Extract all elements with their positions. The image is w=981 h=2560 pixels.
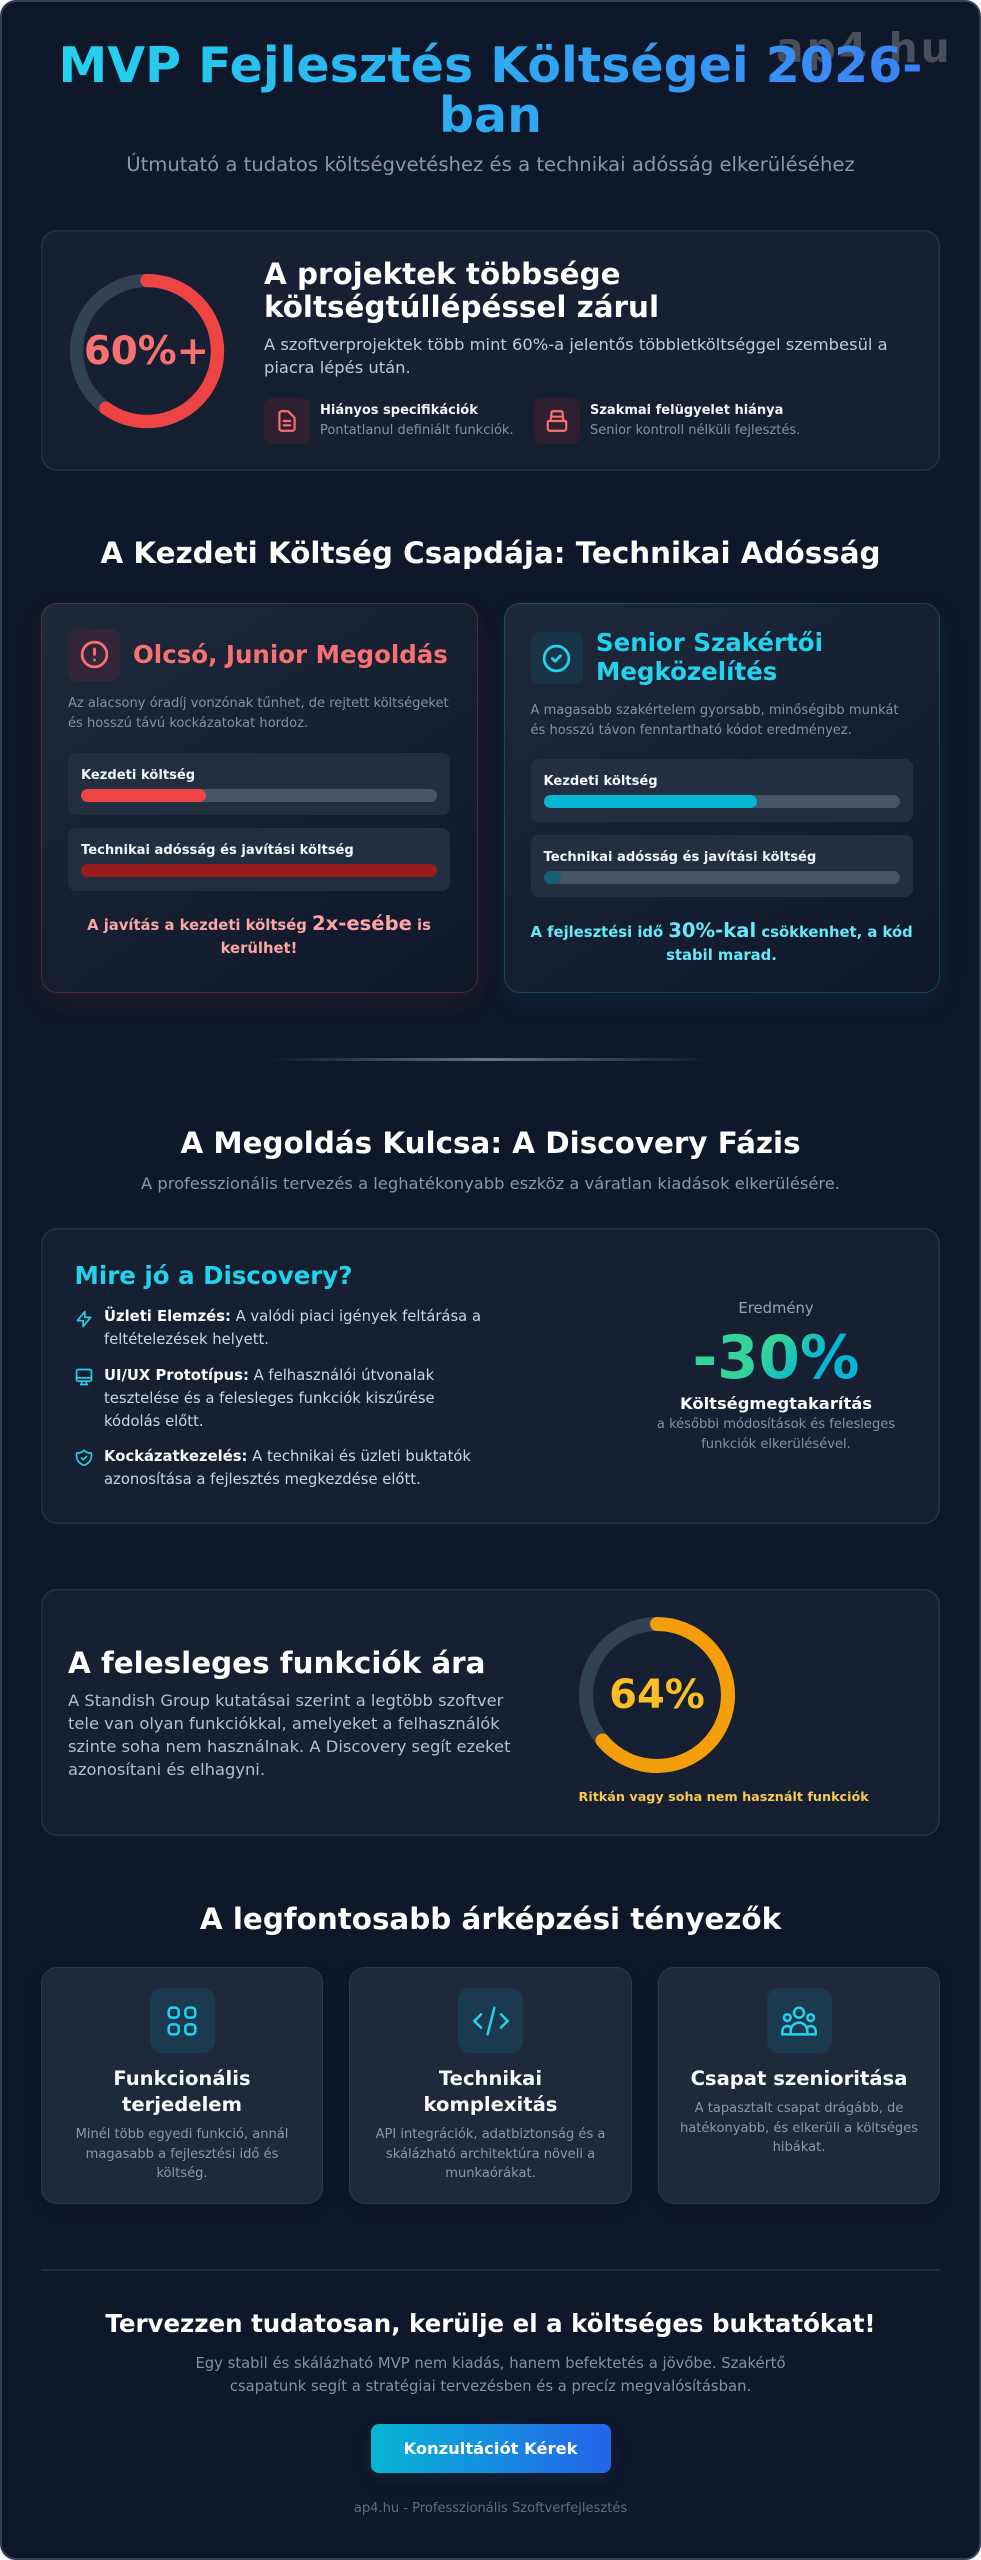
watermark: ap4.hu [776, 24, 953, 72]
description: szinte soha nem használnak. A Discovery segít ezeket [68, 1737, 510, 1756]
item text: UI/UX Prototípus: A felhasználói útvonalak [104, 1366, 434, 1384]
icon: bolt [76, 1310, 92, 1328]
icon: document [264, 398, 310, 444]
item text: feltételezések helyett. [104, 1330, 269, 1348]
card text: Minél több egyedi funkció, annál [76, 2127, 288, 2142]
stat note: funkciók elkerülésével. [701, 1436, 851, 1452]
item text [590, 403, 800, 438]
icon: warning [68, 628, 120, 680]
card text: költség. [156, 2166, 208, 2181]
bar track [544, 871, 900, 884]
callout: A fejlesztési idő 30%-kal csökkenhet, a kód [530, 919, 913, 942]
card text: skálázható architektúra növeli a [386, 2146, 595, 2162]
icon: shield [76, 1450, 92, 1466]
item text: kódolás előtt. [104, 1412, 204, 1430]
card description [530, 703, 899, 738]
heading: A felesleges funkciók ára [68, 1646, 486, 1680]
description: azonosítani és elhagyni. [68, 1760, 265, 1779]
bar track [81, 789, 437, 802]
bar label: Technikai adósság és javítási költség [81, 843, 354, 858]
list item: business analysis [76, 1306, 481, 1348]
description [264, 335, 888, 377]
card heading: Senior Szakértői [596, 628, 823, 657]
callout: stabil marad. [666, 947, 777, 964]
card description [68, 696, 449, 730]
donut chart: 60%+ [70, 274, 224, 428]
heading: költségtúllépéssel zárul [264, 290, 659, 324]
bar: initial cost [68, 753, 450, 815]
result label: Eredmény [738, 1300, 814, 1317]
card text: magasabb a fejlesztési idő és [86, 2146, 278, 2162]
card text [376, 2127, 605, 2181]
item text: Kockázatkezelés: A technikai és üzleti buktatók [104, 1448, 471, 1465]
bar label: Kezdeti költség [81, 768, 195, 783]
panel: unused features [41, 1589, 940, 1836]
item text: Senior kontroll nélküli fejlesztés. [590, 423, 800, 438]
item text: azonosítása a fejlesztés megkezdése előtt. [104, 1471, 421, 1488]
icon: stack [534, 398, 580, 444]
stat: -30% [626, 1323, 926, 1395]
card heading: Megközelítés [596, 657, 777, 686]
donut chart: 60%+: 60%+ [83, 329, 209, 374]
CTA button: Konzultációt Kérek [404, 2439, 578, 2458]
heading: A projektek többsége [264, 256, 621, 290]
CTA button [370, 2424, 610, 2473]
icon: monitor [76, 1368, 92, 1386]
card text: API integrációk, adatbiztonság és a [376, 2127, 605, 2142]
bar label: Technikai adósság és javítási költség [544, 850, 816, 865]
card title: terjedelem [122, 2093, 242, 2116]
stat: -30%: -30% [692, 1324, 860, 1393]
description [68, 1691, 510, 1779]
CTA heading: Tervezzen tudatosan, kerülje el a költséges buktatókat! [105, 2309, 876, 2338]
card title: Technikai [439, 2067, 542, 2090]
card heading: Olcsó, Junior Megoldás [133, 640, 448, 669]
item text [104, 1448, 471, 1488]
item text: Hiányos specifikációk [320, 403, 478, 418]
item text: tesztelése és a felesleges funkciók kiszűrése [104, 1390, 435, 1406]
card text: hibákat. [773, 2140, 825, 2155]
card title [113, 2067, 251, 2116]
card: seniority [658, 1967, 940, 2204]
callout [530, 919, 913, 964]
heading: pricing factors: A legfontosabb árképzési tényezők [200, 1902, 781, 1936]
description: A szoftverprojektek több mint 60%-a jelentős többletköltséggel szembesül a [264, 335, 888, 354]
bar track [544, 795, 900, 808]
bar track [81, 864, 437, 877]
panel: senior approach [504, 602, 940, 993]
list item: prototype [76, 1366, 435, 1430]
card title: Funkcionális [113, 2067, 251, 2090]
callout [87, 912, 431, 957]
item text [104, 1306, 481, 1348]
description: A Standish Group kutatásai szerint a legtöbb szoftver [68, 1691, 503, 1710]
card description: és hosszú távon fenntartható kódot eredményez. [530, 722, 852, 738]
CTA text: Egy stabil és skálázható MVP nem kiadás, hanem befektetés a jövőbe. Szakértő [195, 2355, 786, 2372]
CTA text [195, 2355, 786, 2395]
card description: A magasabb szakértelem gyorsabb, minőségibb munkát [530, 703, 899, 718]
bar: technical debt [530, 835, 912, 897]
bar label: Kezdeti költség [544, 774, 658, 789]
result stat [657, 1300, 895, 1452]
donut caption: Ritkán vagy soha nem használt funkciók [578, 1790, 869, 1805]
icon: grid [150, 1988, 214, 2053]
card heading [596, 628, 823, 686]
card description: és hosszú távú kockázatokat hordoz. [68, 716, 308, 730]
card text: hatékonyabb, és elkerüli a költséges [680, 2120, 918, 2136]
card title [424, 2067, 557, 2116]
list item: risk management [76, 1448, 471, 1488]
description: tele van olyan funkciókkal, amelyeket a felhasználók [68, 1714, 500, 1733]
card text [76, 2127, 288, 2181]
stat note [657, 1417, 895, 1452]
footer: ap4.hu - Professzionális Szoftverfejlesztés [354, 2501, 627, 2516]
panel: 60% overrun [41, 230, 940, 471]
title: ban [439, 87, 542, 144]
card text: munkaórákat. [445, 2166, 536, 2181]
subtitle: Útmutató a tudatos költségvetéshez és a technikai adósság elkerüléséhez [126, 153, 855, 176]
item: missing specs [264, 398, 514, 444]
bar: initial cost [530, 759, 912, 822]
item: lack of supervision [534, 398, 800, 444]
icon: team [766, 1988, 832, 2053]
item text [320, 403, 514, 438]
panel: junior solution [41, 602, 478, 993]
card title: Csapat szenioritása [691, 2067, 907, 2090]
panel: discovery [41, 1228, 940, 1524]
card: complexity [349, 1967, 632, 2204]
item text: Pontatlanul definiált funkciók. [320, 423, 514, 438]
stat caption: Költségmegtakarítás [680, 1394, 872, 1413]
icon: code [458, 1988, 523, 2053]
callout: A javítás a kezdeti költség 2x-esébe is [87, 912, 431, 935]
callout: kerülhet! [221, 940, 297, 957]
heading [264, 256, 659, 324]
CTA text: csapatunk segít a stratégiai tervezésben és a precíz megvalósításban. [230, 2378, 751, 2395]
item text [104, 1366, 435, 1430]
card title: komplexitás [424, 2093, 557, 2116]
stat note: a későbbi módosítások és felesleges [657, 1417, 895, 1432]
item text: Szakmai felügyelet hiánya [590, 403, 783, 418]
title [0, 41, 981, 141]
bar: technical debt [68, 828, 450, 891]
card: scope [41, 1967, 323, 2204]
heading: discovery: A Megoldás Kulcsa: A Discovery Fázis [180, 1126, 801, 1160]
item text: Üzleti Elemzés: A valódi piaci igények feltárása a [104, 1308, 481, 1324]
panel heading: Mire jó a Discovery? [74, 1261, 352, 1290]
card description: Az alacsony óradíj vonzónak tűnhet, de rejtett költségeket [68, 696, 449, 711]
subtitle: discovery: A professzionális tervezés a leghatékonyabb eszköz a váratlan kiadások elkerülésére. [141, 1174, 840, 1193]
title: MVP Fejlesztés Költségei 2026- [58, 37, 923, 94]
card text: A tapasztalt csapat drágább, de [695, 2101, 903, 2116]
donut chart: 64% [579, 1617, 735, 1773]
heading: technical debt: A Kezdeti Költség Csapdája: Technikai Adósság [100, 536, 881, 570]
card text [680, 2101, 918, 2155]
icon: check [530, 632, 582, 684]
description: piacra lépés után. [264, 358, 411, 377]
donut chart: 64%: 64% [609, 1672, 705, 1718]
